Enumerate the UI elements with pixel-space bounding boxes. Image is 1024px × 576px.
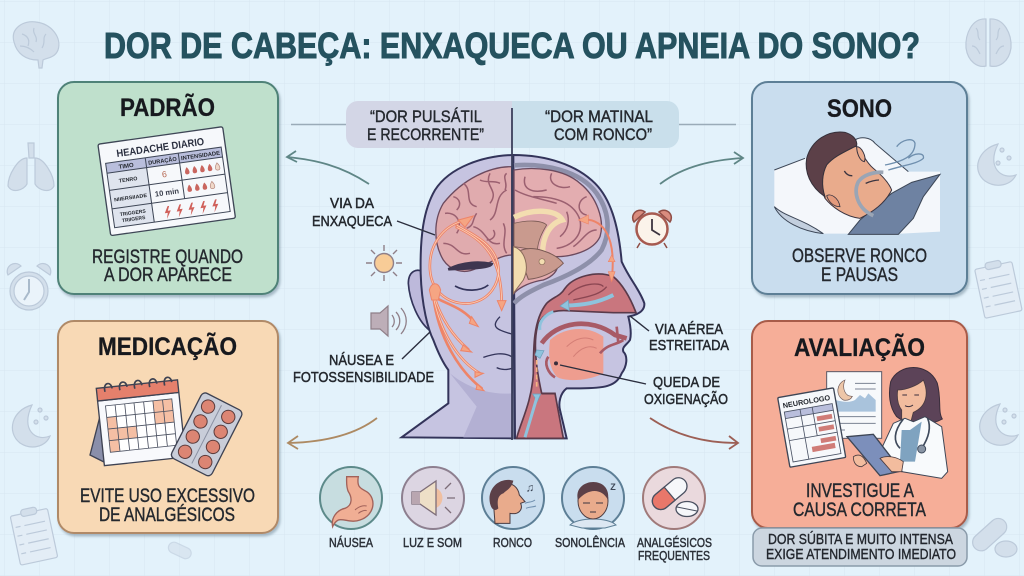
quote boxes: COM RONCO” (554, 126, 652, 144)
illustration: sleeping man (774, 132, 940, 234)
label: via aérea estreitada: VIA AÉREA (655, 321, 723, 338)
text: medicação: EVITE USO EXCESSIVO (80, 486, 255, 507)
panel: sono (752, 82, 967, 294)
heading: sono: SONO (827, 95, 892, 123)
panel: avaliação (752, 321, 967, 528)
illustration: doctor with records: NEUROLOGO (782, 393, 831, 410)
text: padrão: REGISTRE QUANDO (92, 247, 243, 268)
label: queda de oxigenação: OXIGENAÇÃO (644, 391, 728, 408)
callout: warning: EXIGE ATENDIMENTO IMEDIATO (766, 546, 956, 563)
central head illustration (402, 155, 644, 438)
text: medicação (80, 486, 255, 526)
illustration: headache diary: TRIGGERS (120, 208, 147, 218)
icon: luz e som (402, 467, 464, 529)
illustration: headache diary (98, 127, 236, 236)
heading: avaliação: AVALIAÇÃO (794, 332, 925, 362)
icon: náusea (320, 467, 382, 529)
label: analgésicos frequentes: ANALGÉSICOS (637, 535, 712, 550)
panel: padrão (58, 82, 278, 294)
heading: medicação: MEDICAÇÃO (98, 331, 237, 361)
text: avaliação: INVESTIGUE A (806, 481, 914, 502)
illustration: headache diary: DURAÇÃO (148, 156, 178, 167)
label: náusea: NÁUSEA (329, 535, 373, 550)
illustration: headache diary: HEADACHE DIARIO (116, 137, 205, 160)
icon: speaker (371, 306, 406, 336)
text: medicação: DE ANALGÉSICOS (99, 505, 235, 526)
right half: sleep apnea (513, 155, 644, 438)
label: queda de oxigenação (560, 365, 728, 408)
quote boxes: E RECORRENTE” (367, 126, 484, 144)
label: náusea e fotossensibilidade (293, 332, 434, 386)
label: via aérea estreitada (630, 316, 729, 354)
label: queda de oxigenação: QUEDA DE (653, 374, 720, 391)
icon: analgésicos (643, 467, 705, 529)
label: analgésicos frequentes (637, 535, 712, 563)
illustration: headache diary: 10 min (154, 186, 180, 199)
illustration: headache diary: INTENSIDADE (181, 151, 221, 162)
label: via da enxaqueca: VIA DA (330, 195, 374, 212)
left half: migraine (402, 155, 513, 438)
text: avaliação (793, 481, 926, 521)
label: luz e som: LUZ E SOM (403, 535, 462, 550)
text: sono: OBSERVE RONCO (792, 246, 927, 267)
label: via da enxaqueca: ENXAQUECA (312, 213, 392, 230)
illustration: headache diary: TENRO (119, 176, 138, 185)
panel: medicação (58, 321, 278, 533)
icon: sonolência: Z (610, 482, 616, 492)
illustration: headache diary: TRIIGERS (122, 215, 146, 224)
arrow: to padrão (287, 151, 369, 184)
icon: sonolência (562, 467, 624, 529)
quote boxes (291, 101, 736, 148)
label: analgésicos frequentes: FREQUENTES (638, 548, 710, 563)
label: via da enxaqueca (312, 195, 435, 235)
illustration: headache diary: TIMO (118, 163, 134, 171)
heading: padrão: PADRÃO (120, 92, 215, 122)
text: sono: E PAUSAS (821, 265, 898, 286)
text: padrão (92, 247, 243, 286)
arrow: to sono (660, 152, 743, 184)
label: náusea e fotossensibilidade: NÁUSEA E (329, 352, 394, 369)
arrow: to medicação (288, 418, 377, 449)
icon: ronco: ♫ (526, 483, 534, 495)
center divider (511, 108, 513, 440)
illustration: calendar and pills (90, 376, 244, 477)
illustration: headache diary: 6 (161, 169, 168, 180)
illustration: doctor with records (778, 367, 948, 478)
label: sonolência: SONOLÊNCIA (555, 535, 625, 550)
label: náusea e fotossensibilidade: FOTOSSENSIBILIDADE (293, 369, 434, 386)
label: ronco: RONCO (493, 535, 532, 550)
label: via aérea estreitada: ESTREITADA (649, 337, 729, 354)
text: avaliação: CAUSA CORRETA (793, 500, 926, 521)
callout: warning (753, 528, 967, 566)
illustration: headache diary: NIIERSIIADE (114, 193, 148, 203)
quote boxes: “DOR MATINAL (545, 108, 653, 126)
text: padrão: A DOR APARECE (104, 265, 232, 286)
icon: ronco (482, 467, 544, 529)
text: sono (792, 246, 927, 286)
quote boxes: “DOR PULSÁTIL (370, 107, 482, 126)
arrow: to avaliação (650, 418, 738, 449)
icon: sun (366, 245, 402, 281)
icon: alarm clock (633, 210, 671, 248)
callout: warning: DOR SÚBITA E MUITO INTENSA (768, 531, 953, 548)
